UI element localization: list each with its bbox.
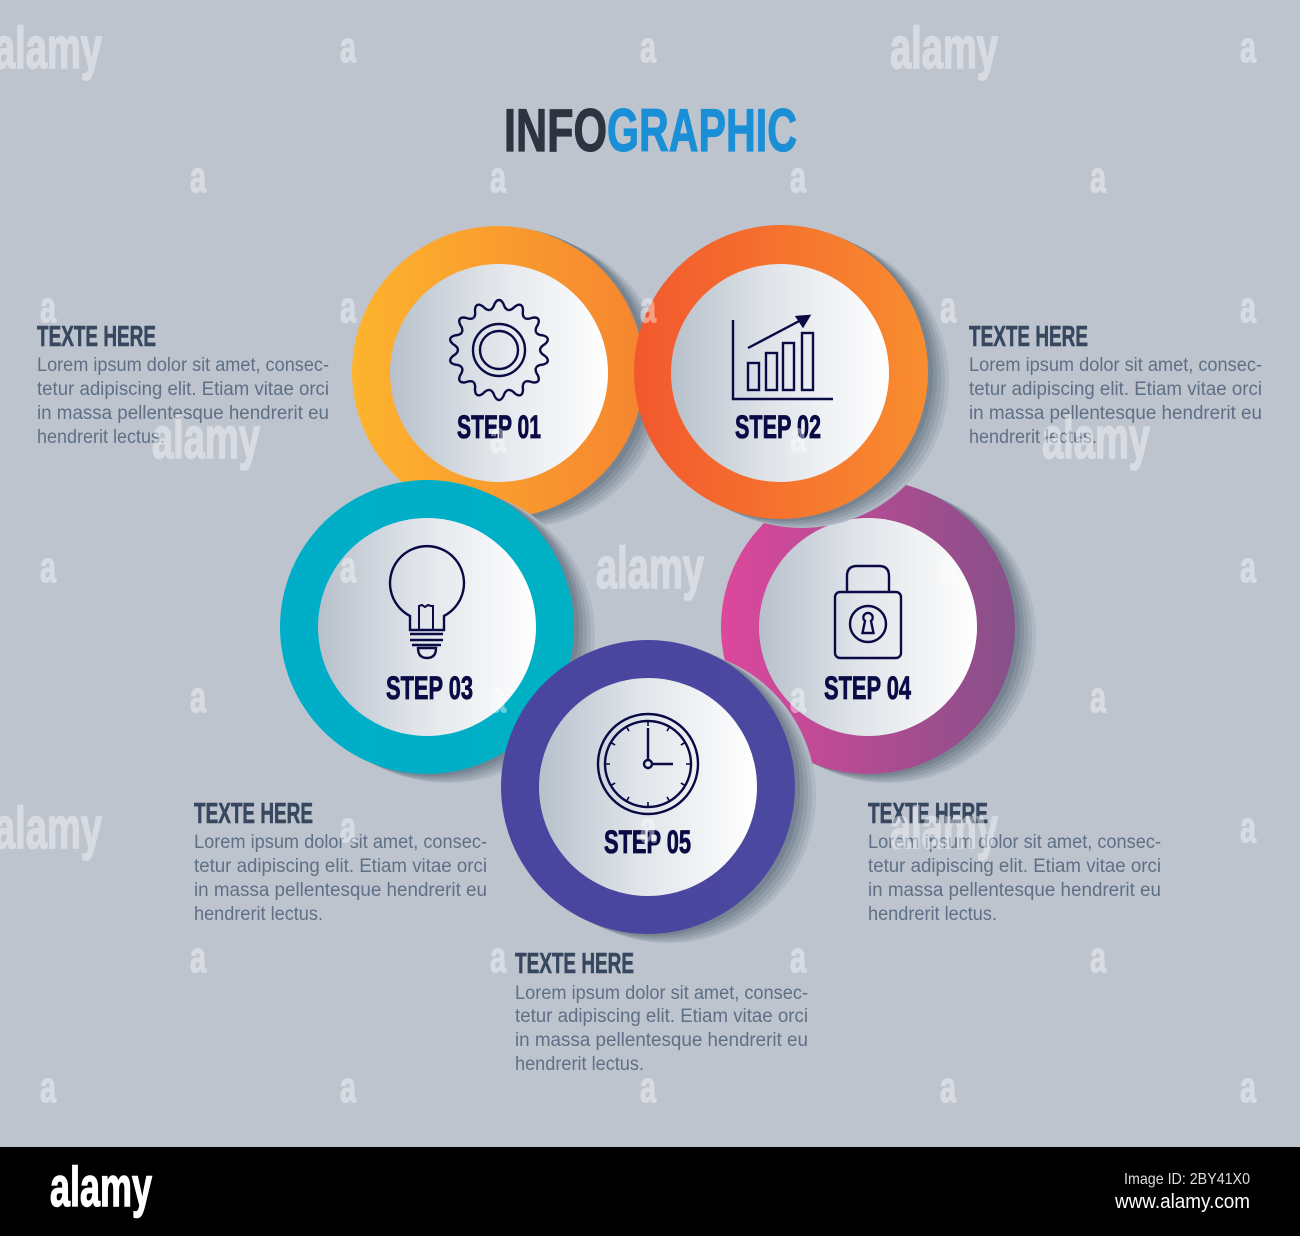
watermarks: a <box>640 283 656 332</box>
panel: step 03 circle <box>280 480 595 783</box>
watermarks: a <box>340 283 356 332</box>
watermarks: a <box>40 1063 56 1112</box>
watermarks: a <box>640 803 656 852</box>
text block: step 04 description: hendrerit lectus. <box>868 904 997 925</box>
text block: step 03 description: in massa pellentesque hendrerit eu <box>194 880 487 901</box>
panel: step 04 circle <box>721 480 1036 783</box>
watermarks: a <box>940 1063 956 1112</box>
text block: step 01 description: hendrerit lectus. <box>37 427 165 448</box>
watermarks: a <box>1240 23 1256 72</box>
watermarks: a <box>490 933 506 982</box>
text block: step 04 description: in massa pellentesque hendrerit eu <box>868 880 1161 901</box>
image id: Image ID: 2BY41X0 <box>1124 1171 1250 1188</box>
text block: step 01 description: Lorem ipsum dolor sit amet, consec- <box>37 355 329 376</box>
title: INFO <box>504 97 607 164</box>
watermarks: a <box>40 543 56 592</box>
panel: step 01 circle <box>352 226 666 528</box>
panel: step 02 circle <box>634 225 949 528</box>
text block: step 02 description: tetur adipiscing elit. Etiam vitae orci <box>969 379 1262 400</box>
watermarks: a <box>490 413 506 462</box>
watermarks: a <box>940 283 956 332</box>
icon: padlock <box>835 566 901 658</box>
watermarks: alamy <box>890 16 998 81</box>
watermarks: a <box>940 543 956 592</box>
watermarks: a <box>790 933 806 982</box>
watermarks: a <box>190 153 206 202</box>
icon: gear <box>448 300 550 400</box>
website: www.alamy.com <box>1114 1191 1250 1213</box>
text block: step 04 description <box>868 798 1161 925</box>
label: step 02: STEP 02 <box>735 409 821 445</box>
panel: step 05 circle <box>501 640 816 943</box>
text block: step 04 description: tetur adipiscing elit. Etiam vitae orci <box>868 856 1161 877</box>
watermarks: a <box>190 933 206 982</box>
text block: step 01 description: TEXTE HERE <box>37 321 156 353</box>
text block: step 05 description: TEXTE HERE <box>515 948 634 980</box>
text block: step 04 description: TEXTE HERE <box>868 798 988 830</box>
watermarks: a <box>1090 673 1106 722</box>
watermarks: a <box>640 1063 656 1112</box>
watermarks: a <box>790 673 806 722</box>
text block: step 02 description: hendrerit lectus. <box>969 427 1097 448</box>
icon: clock <box>598 714 698 814</box>
watermarks: a <box>1090 933 1106 982</box>
text block: step 02 description: in massa pellentesque hendrerit eu <box>969 403 1262 424</box>
watermarks: a <box>340 803 356 852</box>
footer logo: alamy <box>50 1155 152 1218</box>
text block: step 05 description <box>515 948 808 1075</box>
label: step 03: STEP 03 <box>386 670 473 706</box>
label: step 05: STEP 05 <box>604 824 691 860</box>
text block: step 02 description: TEXTE HERE <box>969 321 1088 353</box>
label: step 04: STEP 04 <box>824 670 911 706</box>
watermarks: a <box>1240 543 1256 592</box>
text block: step 05 description: in massa pellentesque hendrerit eu <box>515 1030 808 1051</box>
text block: step 03 description: hendrerit lectus. <box>194 904 323 925</box>
watermarks: alamy <box>1042 406 1150 471</box>
watermarks: a <box>190 673 206 722</box>
footer bar <box>0 1147 1300 1236</box>
text block: step 03 description <box>194 798 487 925</box>
text block: step 05 description: Lorem ipsum dolor sit amet, consec- <box>515 983 808 1004</box>
icon: bar chart <box>733 316 833 399</box>
watermarks: a <box>640 23 656 72</box>
watermarks: a <box>1240 283 1256 332</box>
icon: light bulb <box>390 546 464 658</box>
text block: step 05 description: tetur adipiscing elit. Etiam vitae orci <box>515 1006 808 1027</box>
text block: step 04 description: Lorem ipsum dolor sit amet, consec- <box>868 832 1161 853</box>
watermarks: alamy <box>596 536 704 601</box>
watermarks: a <box>340 1063 356 1112</box>
label: step 01: STEP 01 <box>457 409 541 445</box>
title <box>504 97 797 164</box>
text block: step 03 description: tetur adipiscing elit. Etiam vitae orci <box>194 856 487 877</box>
watermarks: a <box>790 153 806 202</box>
text block: step 02 description <box>969 321 1262 448</box>
text block: step 01 description <box>37 321 329 448</box>
text block: step 01 description: in massa pellentesque hendrerit eu <box>37 403 329 424</box>
watermarks: a <box>490 153 506 202</box>
watermarks: a <box>1090 153 1106 202</box>
text block: step 03 description: Lorem ipsum dolor sit amet, consec- <box>194 832 487 853</box>
watermarks: alamy <box>152 406 260 471</box>
text block: step 03 description: TEXTE HERE <box>194 798 313 830</box>
watermarks: a <box>1240 803 1256 852</box>
text block: step 01 description: tetur adipiscing elit. Etiam vitae orci <box>37 379 329 400</box>
watermarks: a <box>790 413 806 462</box>
watermarks: a <box>340 23 356 72</box>
watermarks: a <box>40 283 56 332</box>
text block: step 02 description: Lorem ipsum dolor sit amet, consec- <box>969 355 1262 376</box>
watermarks: alamy <box>890 796 998 861</box>
text block: step 05 description: hendrerit lectus. <box>515 1054 644 1075</box>
title: GRAPHIC <box>607 97 797 164</box>
watermarks: a <box>1240 1063 1256 1112</box>
watermarks: a <box>340 543 356 592</box>
watermarks: a <box>490 673 506 722</box>
